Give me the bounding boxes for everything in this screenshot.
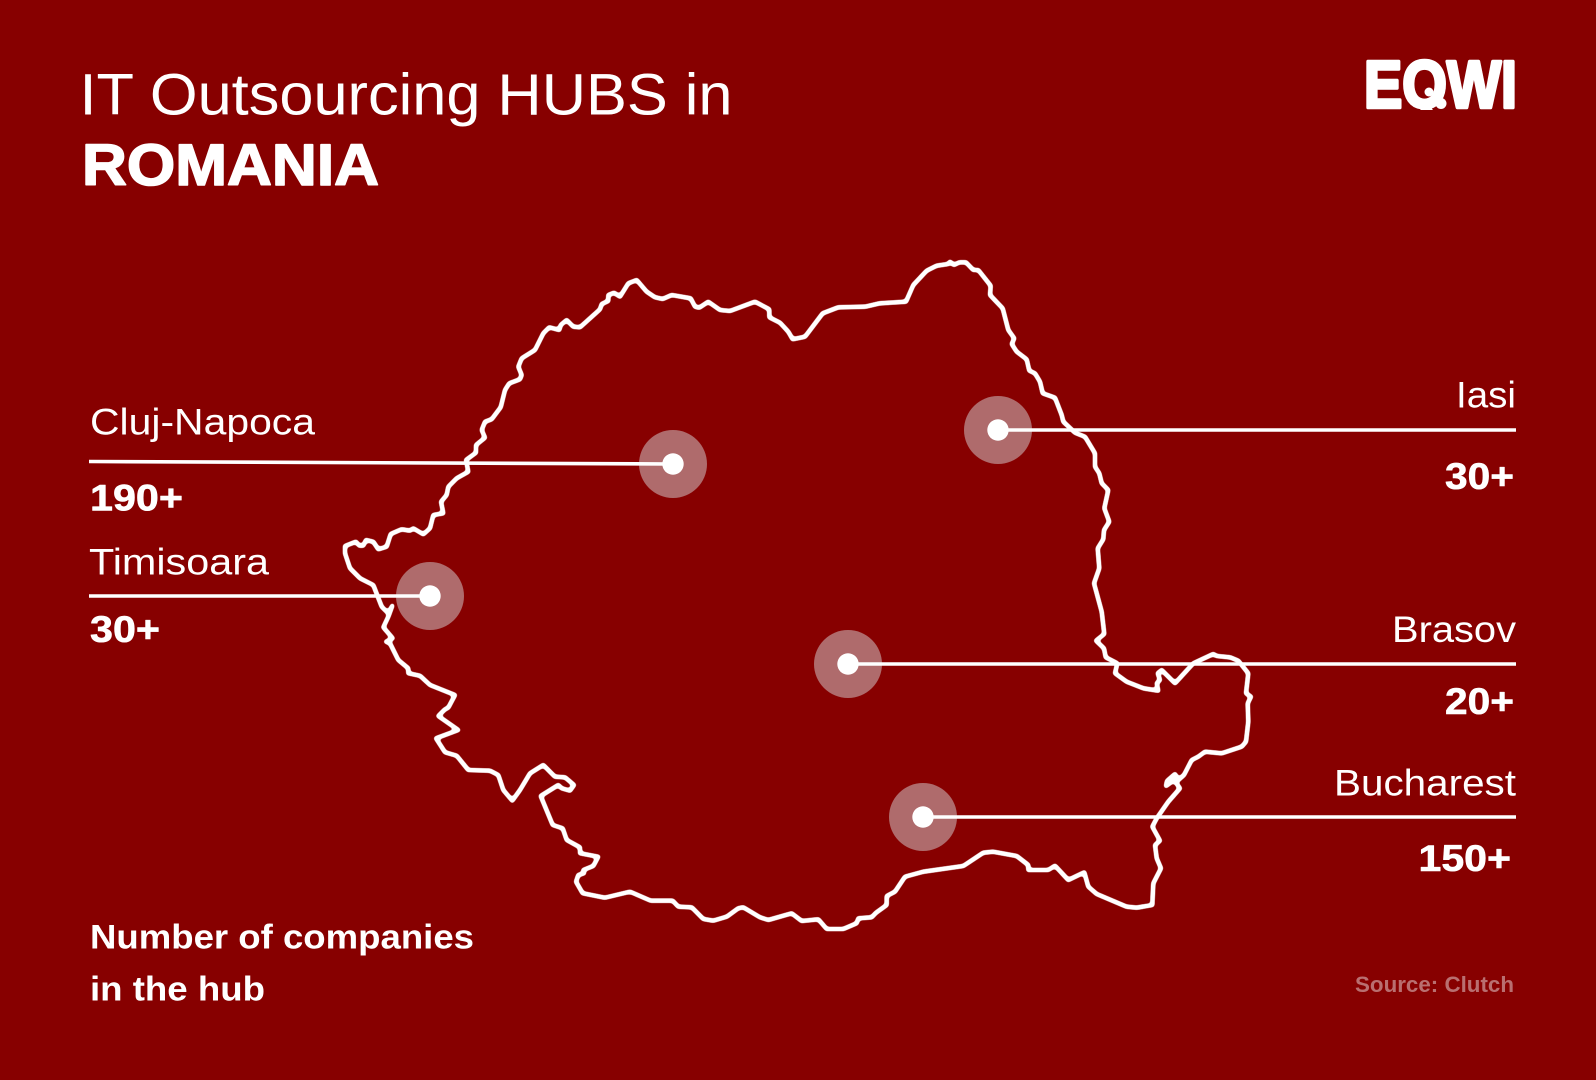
map: Romania outline: [345, 262, 1251, 929]
hub: Iasi: Iasi: [1456, 375, 1516, 416]
hub: Brasov: [814, 609, 1517, 722]
title: ROMANIA: [82, 133, 379, 198]
hub: Iasi: [964, 375, 1516, 497]
hub: Bucharest: Bucharest: [1334, 762, 1517, 804]
legend note: Number of companies: [90, 918, 474, 956]
legend note: [90, 918, 474, 1008]
logo: EQWI: EQWI: [1364, 48, 1517, 122]
hub: Brasov: Brasov: [1392, 609, 1517, 650]
hub: Iasi: 30+: [1445, 456, 1514, 497]
hub: Timisoara: Timisoara: [89, 542, 269, 582]
source: Source: Clutch: [1355, 972, 1514, 997]
hub: Timisoara: 30+: [90, 609, 160, 650]
hub: Bucharest: 150+: [1418, 838, 1511, 879]
hub: Brasov: 20+: [1445, 681, 1514, 722]
hub: Cluj-Napoca: Cluj-Napoca: [90, 402, 315, 442]
title: [80, 63, 733, 198]
title: IT Outsourcing HUBS in: [80, 63, 733, 128]
hub: Timisoara: [89, 542, 464, 650]
logo: EQWI: [1366, 58, 1515, 110]
legend note: in the hub: [90, 970, 265, 1008]
hub: Cluj-Napoca: 190+: [90, 478, 183, 518]
hub: Cluj-Napoca: [89, 402, 707, 518]
hub: Bucharest: [889, 762, 1517, 879]
